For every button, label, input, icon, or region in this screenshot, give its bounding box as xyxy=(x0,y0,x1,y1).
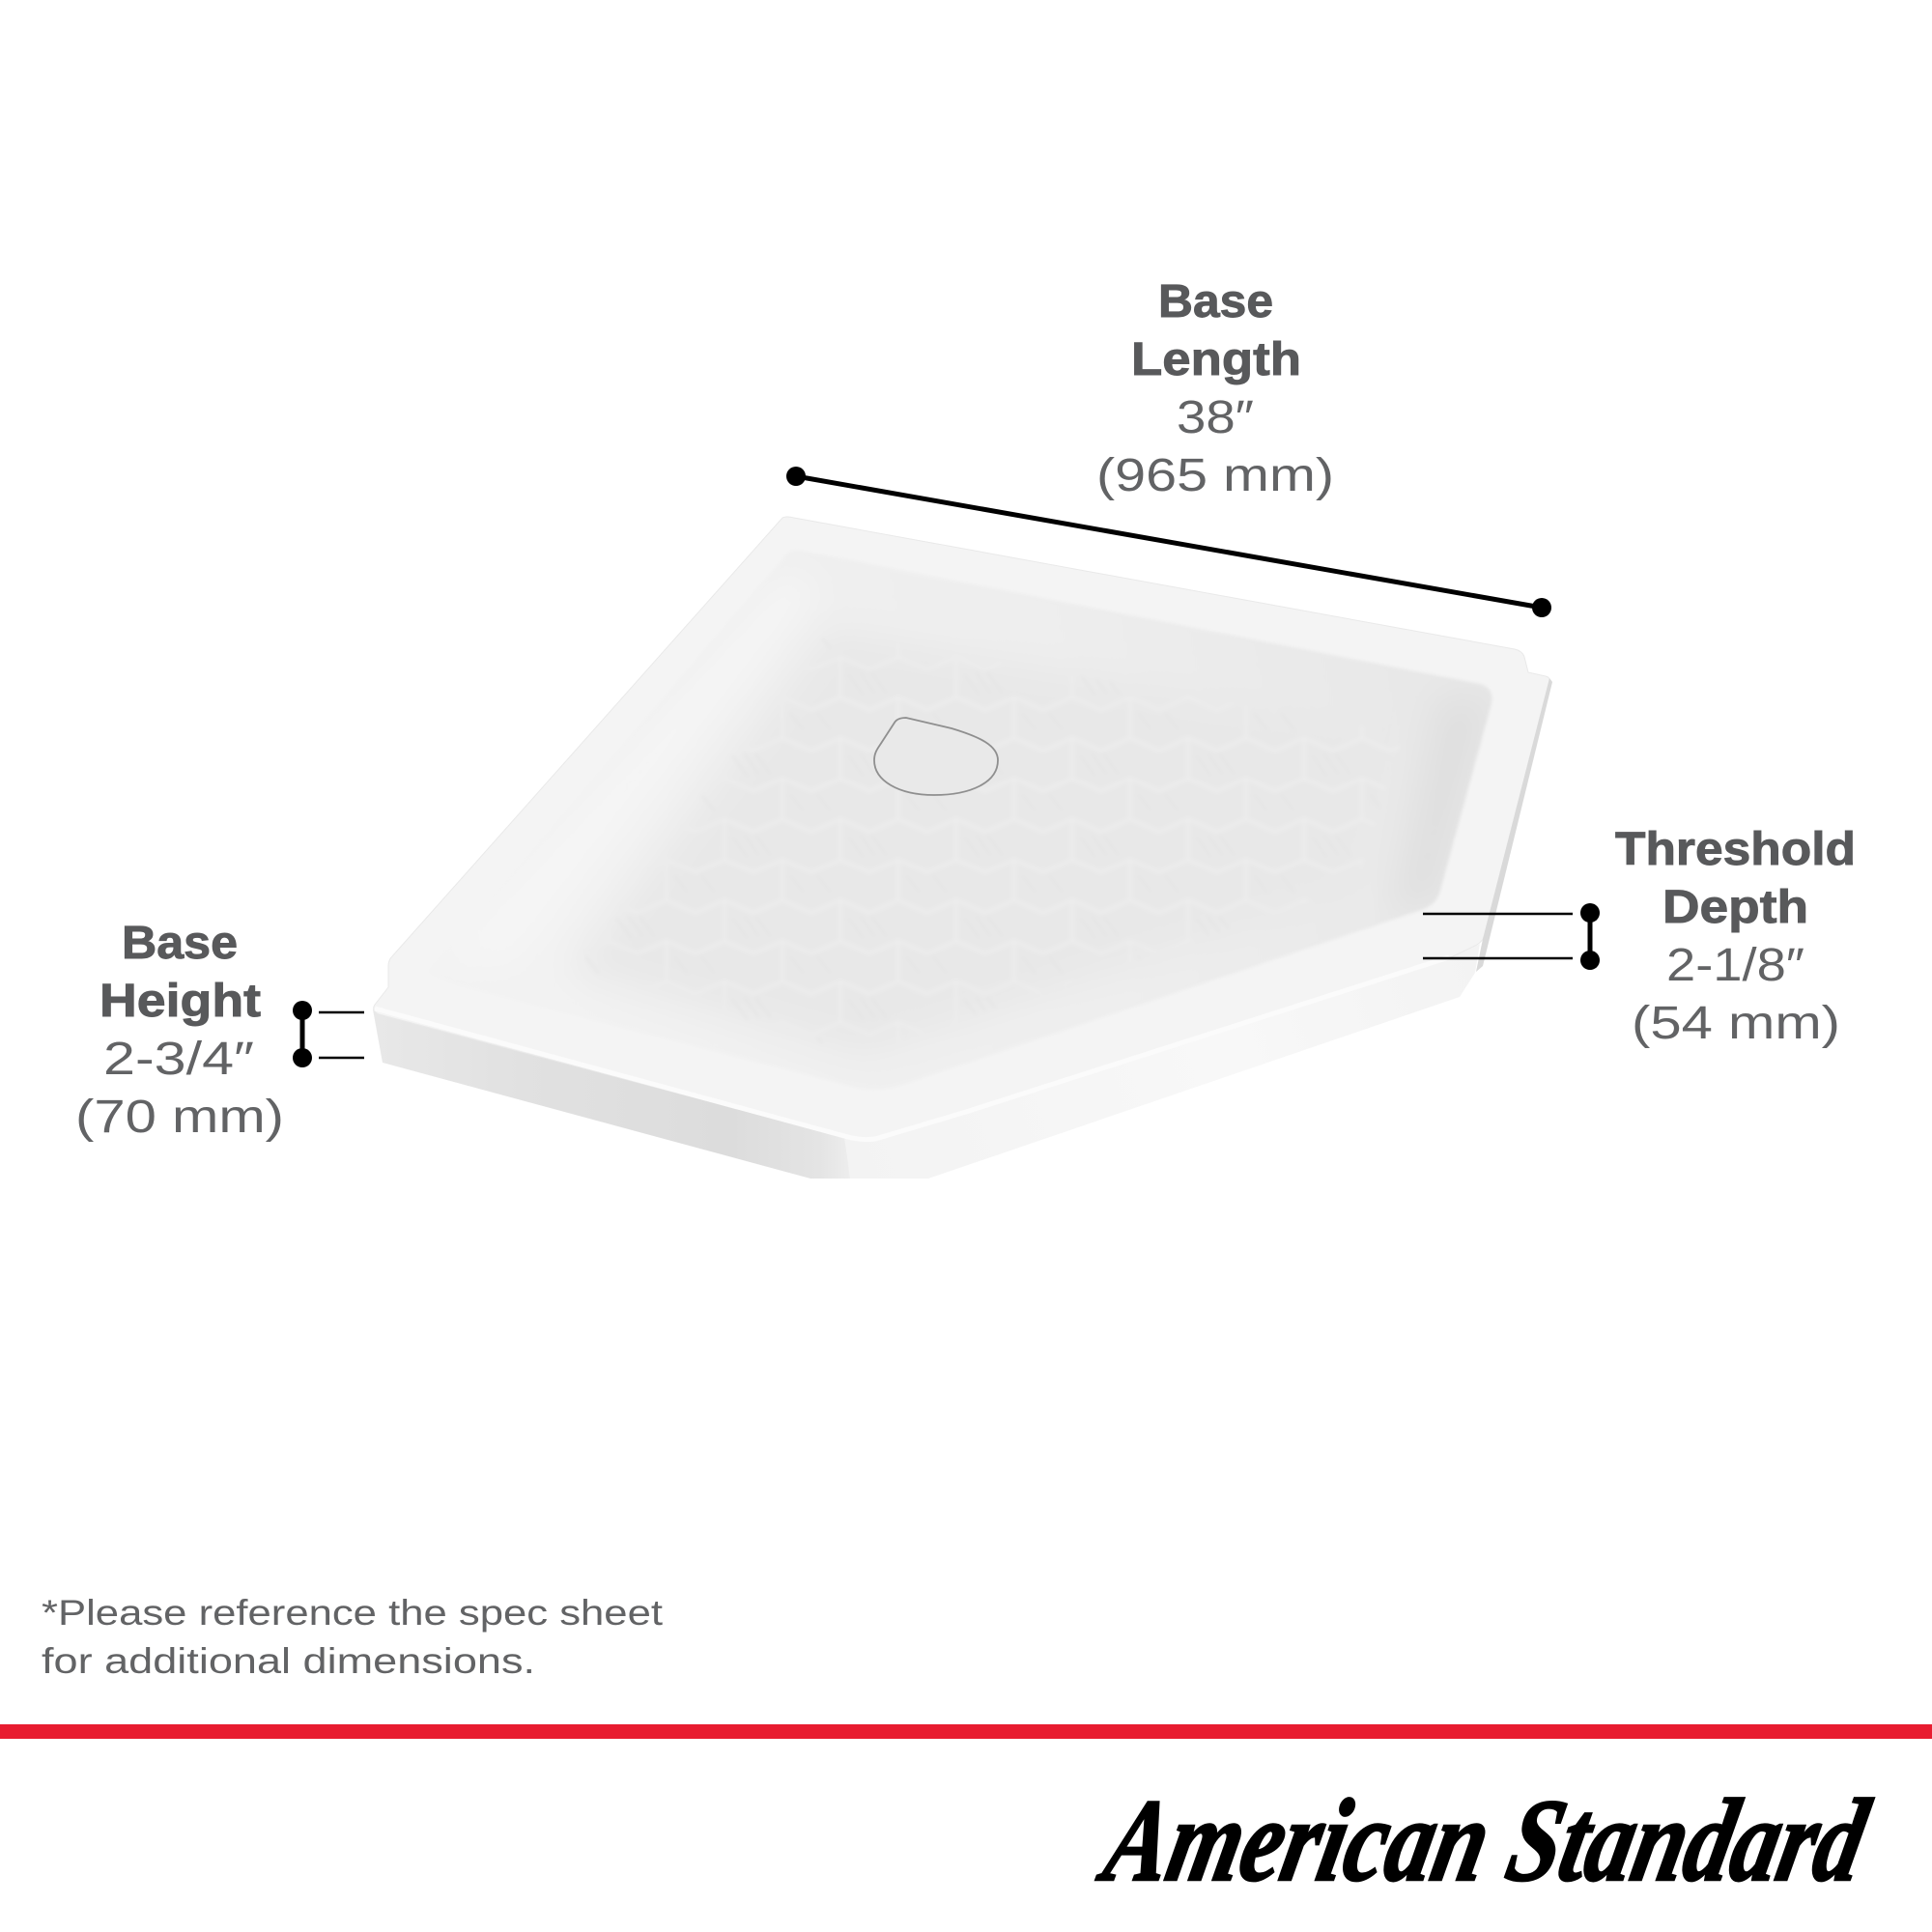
basin xyxy=(585,625,1492,1049)
label: base length: Length xyxy=(1131,334,1301,385)
label: base height: (70 mm) xyxy=(75,1092,284,1143)
label: base height: 2-3/4″ xyxy=(103,1034,254,1085)
label: threshold depth: Threshold xyxy=(1615,824,1856,875)
label: base length xyxy=(1096,276,1334,501)
top rim surface xyxy=(374,517,1549,1141)
left wall highlight xyxy=(444,570,821,966)
label: base height: Base xyxy=(122,918,238,969)
base height dimension marker xyxy=(293,1001,364,1067)
label: base length: (965 mm) xyxy=(1096,450,1334,501)
slip-resistant floor texture xyxy=(570,632,1404,1055)
label: base height xyxy=(75,918,284,1143)
front edge highlight xyxy=(375,957,1449,1140)
right wall shadow xyxy=(1424,853,1430,860)
right side shadow strip xyxy=(1476,678,1552,972)
label: threshold depth: Depth xyxy=(1662,882,1808,933)
threshold depth dimension marker xyxy=(1423,903,1600,970)
label: base length: Base xyxy=(1158,276,1273,327)
label: threshold depth: (54 mm) xyxy=(1632,998,1840,1049)
drain cover xyxy=(874,718,998,795)
front right face xyxy=(844,944,1480,1179)
label: threshold depth: 2-1/8″ xyxy=(1666,940,1804,991)
label: base length: 38″ xyxy=(1177,392,1254,443)
footnote: for additional dimensions. xyxy=(42,1641,535,1681)
front left face xyxy=(373,1009,875,1179)
base length dimension line xyxy=(786,467,1551,617)
red divider bar xyxy=(0,1724,1932,1739)
label: threshold depth xyxy=(1615,824,1856,1049)
shower base product illustration xyxy=(373,517,1552,1179)
footnote: *Please reference the spec sheet xyxy=(42,1593,664,1633)
basin floor xyxy=(632,858,719,980)
footnote xyxy=(42,1593,664,1681)
label: base height: Height xyxy=(99,976,261,1027)
